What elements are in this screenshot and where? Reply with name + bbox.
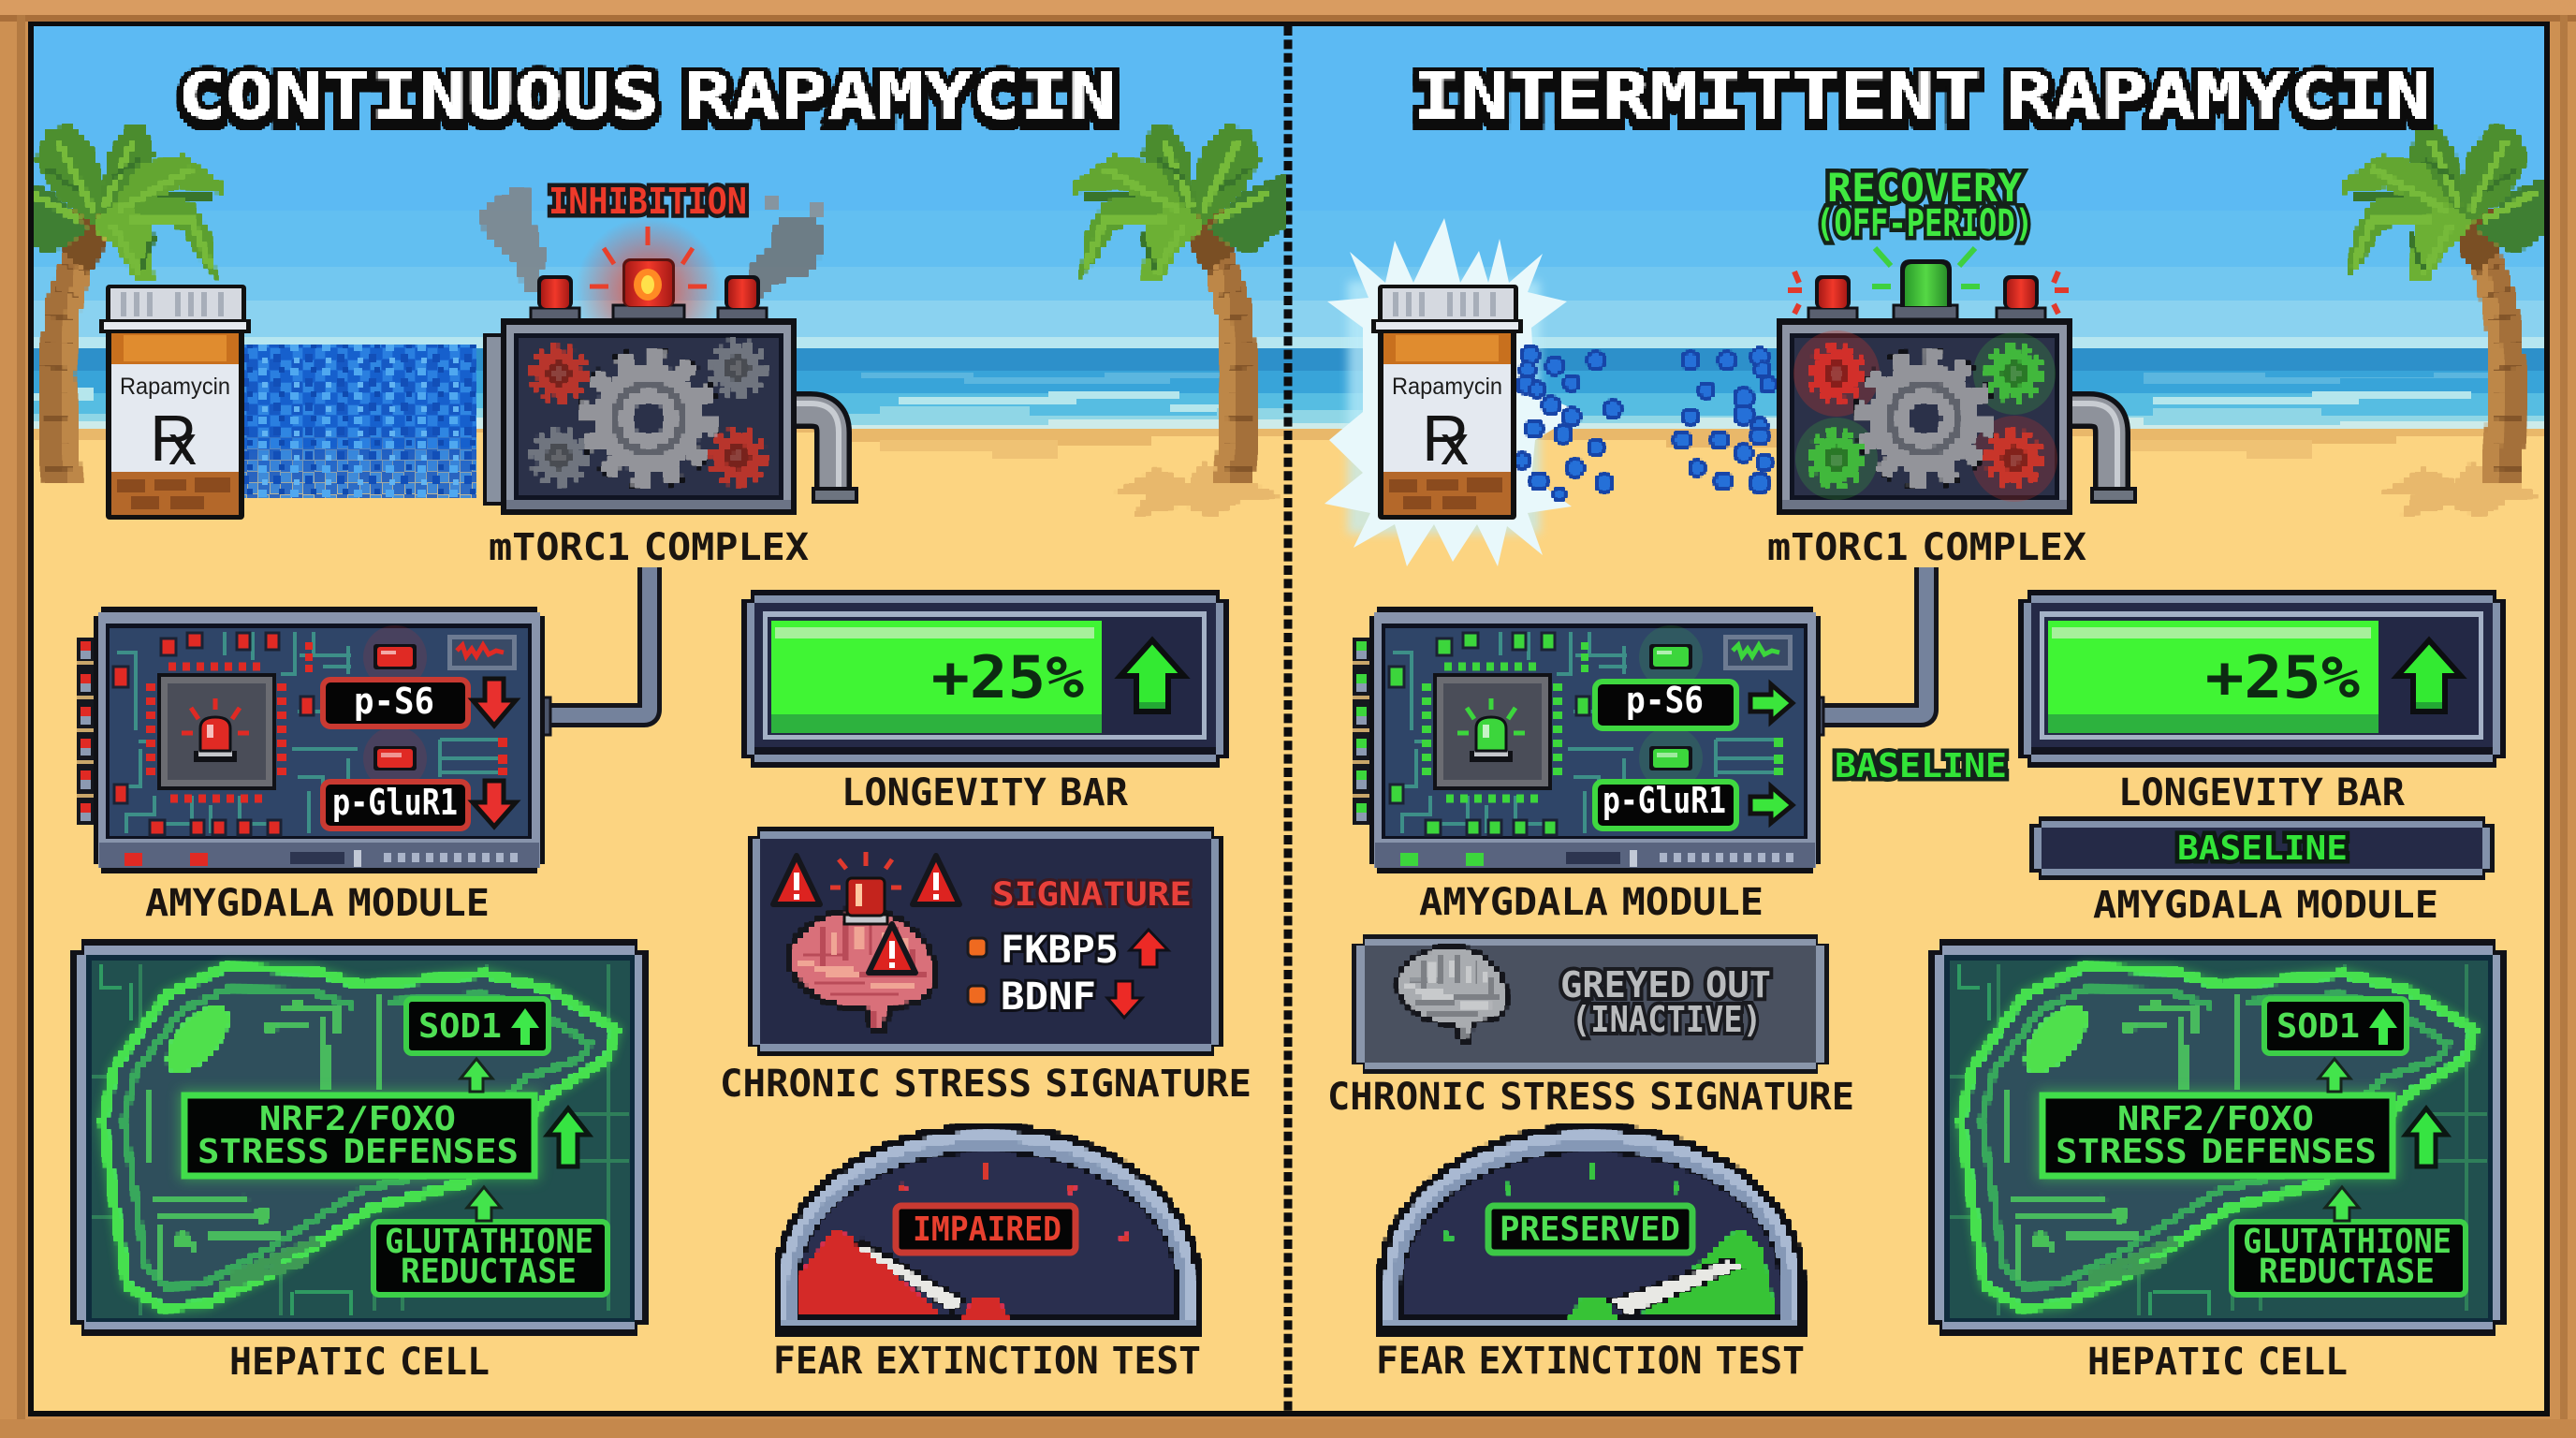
label: mTORC1 complex: mTORC1 COMPLEX [1767,526,2086,569]
label: recovery off-period: (OFF-PERIOD) [1816,202,2033,245]
mTORC1 machine [1777,318,2135,515]
starburst behind bottle [1325,218,1582,566]
connector pipe [547,567,650,715]
panel: hepatic cell: REDUCTASE [2259,1253,2435,1291]
fear extinction gauge: preserved [1377,1123,1806,1336]
panel: amygdala module: p-S6 [1626,680,1704,721]
label: inhibition: INHIBITION [549,181,747,222]
centre divider [1284,26,1292,1411]
icon: rapamycin bottle: x [168,414,197,477]
label: amygdala module: AMYGDALA MODULE [145,882,490,925]
panel: greyed out stress signature [1352,934,1829,1074]
label: chronic stress signature: CHRONIC STRESS SIGNATURE [720,1063,1251,1106]
panel: longevity bar: +25% [2205,643,2360,712]
panel: hepatic cell: NRF2/FOXO [2117,1100,2314,1138]
icon: rapamycin bottle: x [1441,414,1469,477]
label: fear extinction test: FEAR EXTINCTION TEST [773,1340,1201,1383]
panel: longevity bar [2018,590,2506,768]
panel: baseline bar [2029,816,2495,880]
panel: intermittent rapamycin [1325,60,2554,1384]
heading: continuous rapamycin: CONTINUOUS RAPAMYCIN [178,60,1117,134]
alarm lights: inhibition [531,217,767,363]
connector pipe [1820,567,1926,715]
panel: hepatic cell: STRESS DEFENSES [198,1133,519,1171]
icon: right palm tree [2342,124,2554,518]
panel: hepatic cell: SOD1 [2276,1007,2360,1046]
panel: hepatic cell: SOD1 [418,1007,502,1046]
panel: amygdala module: p-S6 [354,681,434,722]
label: recovery off-period [1816,165,2033,245]
panel: hepatic cell: STRESS DEFENSES [2056,1133,2377,1171]
icon: right palm tree [1075,124,1287,518]
alarm lights: recovery [1788,248,2069,321]
icon: rapamycin bottle: Rapamycin [1392,374,1502,400]
label: baseline (amygdala): BASELINE [1835,747,2007,785]
mTORC1 machine [485,318,856,515]
panel: amygdala module [77,567,650,873]
heading: intermittent rapamycin: INTERMITTENT RAPAMYCIN [1413,60,2432,134]
panel: amygdala module [1353,567,1926,873]
panel: hepatic cell: GLUTATHIONE [2243,1223,2452,1261]
icon: rapamycin bottle [99,285,251,520]
panel: longevity bar: +25% [931,643,1084,712]
icon: rapamycin bottle: R [1422,402,1470,475]
panel: continuous rapamycin [9,60,1287,1384]
label: recovery off-period: RECOVERY [1827,165,2023,211]
panel: baseline bar: BASELINE [2177,829,2348,868]
fear extinction gauge: preserved: PRESERVED [1500,1211,1680,1249]
panel: chronic stress signature [748,827,1223,1056]
panel: longevity bar [741,590,1229,768]
label: fear extinction test: FEAR EXTINCTION TEST [1376,1340,1805,1383]
panel: greyed out stress signature: GREYED OUT [1560,964,1771,1005]
icon: rapamycin bottle [1371,285,1523,520]
panel: greyed out stress signature: (INACTIVE) [1572,999,1762,1040]
icon: rapamycin bottle: Rapamycin [120,374,230,400]
label: hepatic cell: HEPATIC CELL [229,1341,490,1384]
label: amygdala module (baseline): AMYGDALA MODULE [2093,884,2438,927]
panel: chronic stress signature: SIGNATURE [992,876,1192,914]
label: chronic stress signature: CHRONIC STRESS SIGNATURE [1327,1076,1854,1119]
panel: chronic stress signature: FKBP5 [1001,929,1119,972]
label: amygdala module: AMYGDALA MODULE [1419,881,1764,924]
icon: left palm tree [34,124,224,483]
label: mTORC1 complex: mTORC1 COMPLEX [489,526,809,569]
panel: hepatic cell [70,939,649,1336]
drug pulses [1515,346,1776,500]
panel: hepatic cell: GLUTATHIONE [385,1223,593,1261]
panel: amygdala module: p-GluR1 [1603,780,1726,821]
fear extinction gauge: impaired [773,1123,1202,1336]
label: longevity bar: LONGEVITY BAR [842,771,1129,814]
fear extinction gauge: impaired: IMPAIRED [913,1211,1061,1249]
panel: hepatic cell: NRF2/FOXO [259,1100,456,1138]
label: longevity bar: LONGEVITY BAR [2118,771,2406,814]
smoke plumes [480,187,826,296]
label: hepatic cell: HEPATIC CELL [2087,1341,2348,1384]
icon: rapamycin bottle: R [150,402,198,475]
panel: chronic stress signature: BDNF [1001,976,1096,1019]
panel: hepatic cell: REDUCTASE [401,1253,577,1291]
drug particle flood [242,345,476,498]
panel: hepatic cell [1928,939,2507,1336]
panel: amygdala module: p-GluR1 [332,782,458,823]
